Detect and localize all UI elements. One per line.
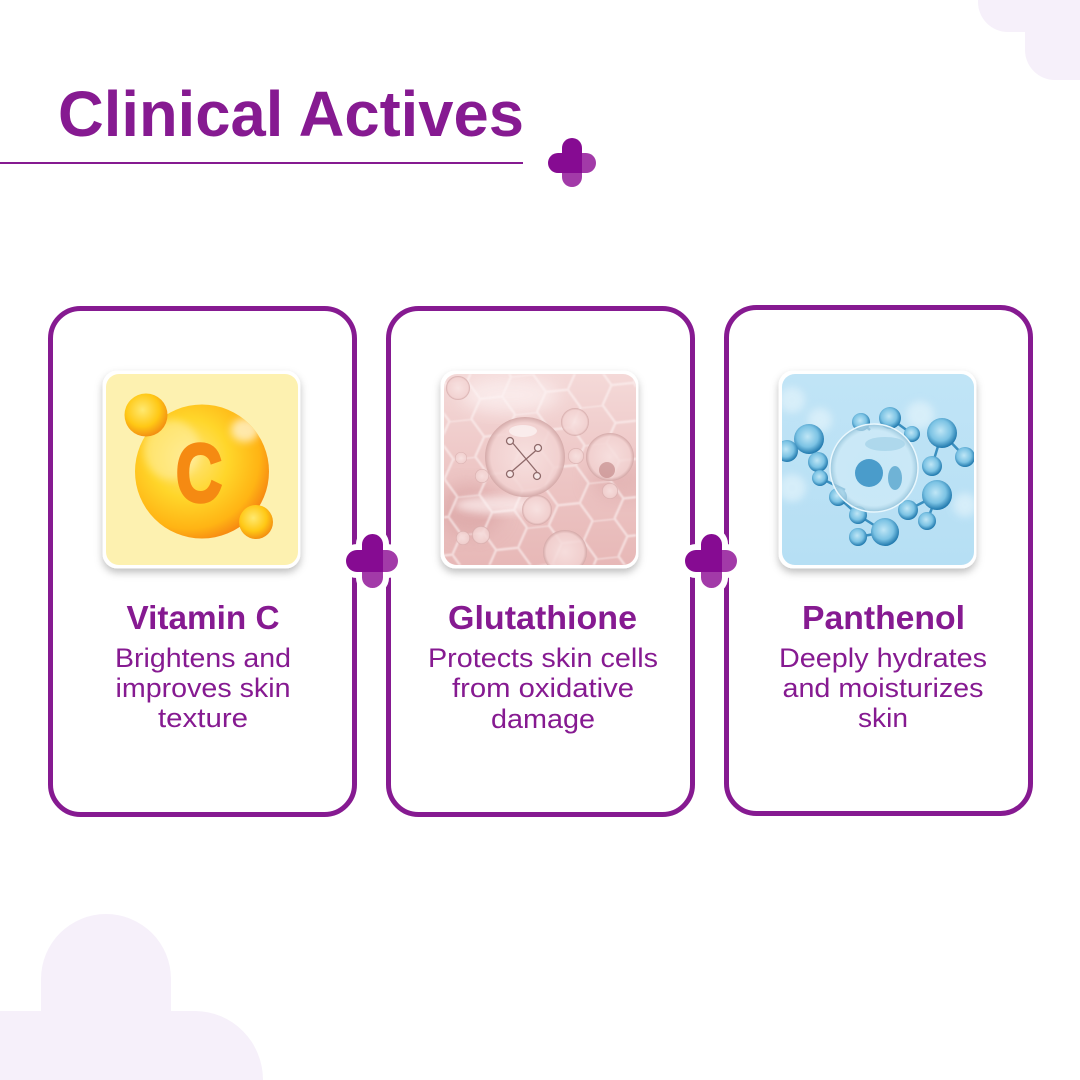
heading: Glutathione: Glutathione [448, 599, 637, 636]
description: Panthenol: and moisturizes [782, 673, 984, 703]
icon: plus connector between cards 2 and 3 [679, 528, 743, 594]
image: Vitamin C molecule: C [176, 428, 222, 519]
description: Vitamin C: Brightens and [115, 643, 291, 673]
description: Vitamin C [115, 643, 291, 733]
panel: Vitamin C [50, 308, 354, 814]
description: Glutathione: Protects skin cells [428, 643, 658, 673]
description: Glutathione: from oxidative [452, 673, 634, 703]
icon: plus connector between cards 1 and 2 [340, 528, 404, 594]
image: Glutathione bubbles [438, 370, 650, 574]
description: Glutathione [428, 643, 658, 734]
image: Vitamin C molecule [102, 370, 300, 568]
icon: title plus [548, 138, 596, 187]
title: Clinical Actives [58, 78, 524, 150]
heading: Vitamin C: Vitamin C [126, 599, 280, 636]
description: Glutathione: damage [491, 704, 595, 734]
description: Panthenol: Deeply hydrates [779, 643, 987, 673]
title underline [0, 162, 523, 164]
image: Panthenol molecule [776, 370, 977, 568]
panel: Panthenol [726, 308, 1030, 814]
description: Panthenol: skin [858, 703, 908, 733]
heading: Panthenol: Panthenol [802, 599, 965, 636]
decoration: top-right corner plus shape [978, 0, 1080, 80]
description: Panthenol [779, 643, 987, 733]
description: Vitamin C: improves skin [116, 673, 290, 703]
description: Vitamin C: texture [158, 703, 248, 733]
decoration: bottom-left corner plus shape [0, 914, 263, 1080]
panel: Glutathione [388, 308, 692, 814]
